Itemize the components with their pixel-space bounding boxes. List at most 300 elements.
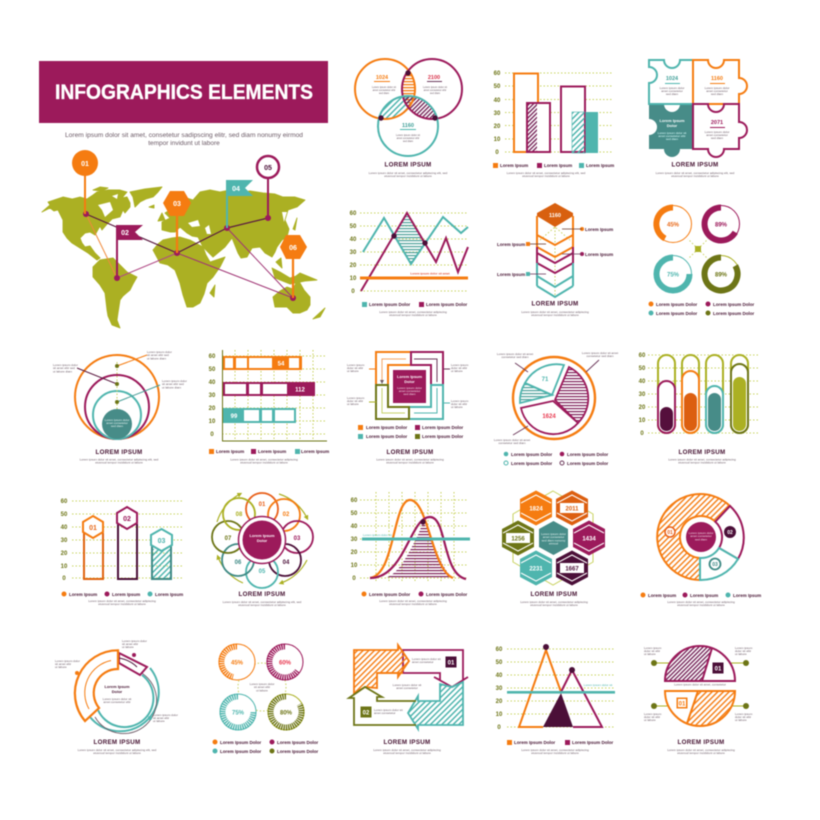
panel: nested square arrows: [347, 352, 469, 465]
panel: chevron tower: [497, 203, 613, 317]
puzzle piece purple: amet consetetur: [706, 133, 728, 137]
flower numbers: 05: [259, 569, 266, 575]
half pies caption: eiusmod tempor incididunt ut labore: [677, 751, 725, 755]
hbar labels: [209, 354, 216, 438]
panel: world map: [42, 150, 325, 328]
pin 04 flag: 04: [232, 186, 240, 193]
puzzle piece teal: amet consetetur: [661, 89, 683, 93]
venn intersection dots: [378, 70, 438, 121]
tower teal chevrons: [537, 263, 573, 297]
hbar labels: 0: [210, 432, 214, 438]
pin 05 ring: [257, 156, 279, 218]
triangle axis labels: 20: [496, 699, 503, 705]
pie leaders: [513, 360, 599, 435]
puzzle piece purple: 2071: [711, 120, 723, 126]
arrows caption: Lorem ipsum dolor sit amet, consectetur adipiscing: [373, 748, 441, 752]
flower caption: eiusmod tempor incididunt ut labore: [238, 603, 286, 607]
purple line: [361, 213, 468, 291]
arrow lower note: amet consetetur: [374, 711, 396, 715]
hexbar axis labels: 10: [61, 564, 68, 570]
triangle caption: Lorem ipsum dolor sit amet, consectetur adipiscing: [521, 748, 589, 752]
pill axis labels: 20: [639, 405, 646, 411]
flower numbers: 03: [294, 536, 301, 542]
triangle apex dots: [543, 644, 575, 673]
pin 03 hexagon: 03: [173, 201, 181, 208]
dark overlap triangle: [543, 693, 573, 727]
honeycomb caption: eiusmod tempor incididunt ut labore: [530, 603, 578, 607]
flower center: Dolor: [257, 538, 268, 543]
line legend: [362, 302, 468, 307]
pie note top right: consetetur sed diam: [586, 354, 614, 358]
bar axis labels: [494, 71, 501, 156]
filled core circle: amet consetetur: [106, 421, 128, 425]
filled core circle: Lorem ipsum dolor: [105, 418, 129, 422]
square note left bottom: dolor sit elitr: [347, 399, 363, 403]
donut 89 purple: 89%: [715, 222, 728, 228]
spiral center text: Dolor: [112, 689, 123, 694]
pie legend: Lorem Ipsum Dolor: [511, 461, 553, 466]
pill heading: LOREM IPSUM: [679, 449, 725, 456]
venn values: 1160: [402, 123, 414, 129]
honeycomb background hexagon: [513, 491, 593, 585]
arrows caption: eiusmod tempor incididunt ut labore: [383, 751, 431, 755]
hexbar caption: eiusmod tempor incididunt ut labore: [98, 602, 146, 606]
square legend: [358, 425, 464, 439]
half note top right: dolor sit elitr: [735, 649, 751, 653]
arrow notes: amet consetetur: [412, 660, 434, 664]
bell caption: Lorem ipsum dolor sit amet, consectetur adipiscing: [379, 599, 447, 603]
panel: triangle chart: [496, 644, 615, 755]
center disc: amet consetetur: [690, 534, 712, 538]
panel: venn diagram: [355, 59, 462, 178]
hbar caption: eiusmod tempor incididunt ut labore: [240, 461, 288, 465]
purple hbar: 112: [295, 388, 305, 394]
orange triangle: [519, 650, 561, 727]
panel: spiral ring: [55, 639, 178, 755]
pill axis labels: 0: [640, 431, 644, 437]
square note left bottom: ut labore: [347, 402, 359, 406]
square note right top: [443, 363, 469, 373]
venn small text 3: sed diam: [403, 140, 413, 143]
teal line: [363, 217, 468, 264]
hex center: eirmod: [549, 542, 558, 546]
hexbar legend: Lorem Ipsum: [69, 592, 97, 597]
honeycomb caption: Lorem ipsum dolor sit amet, consectetur adipiscing: [520, 600, 588, 604]
spiral note right: ut labore: [153, 719, 165, 723]
hexbar legend: Lorem Ipsum: [112, 592, 140, 597]
pill axis labels: 50: [639, 366, 646, 372]
chart axes: [222, 350, 327, 441]
leaders and dots: [77, 355, 160, 404]
ring note top: ut labore diam: [147, 356, 167, 360]
tower label right lower: Lorem Ipsum: [585, 252, 613, 257]
flower numbers: [225, 502, 301, 575]
pin 06 hexagon: [280, 235, 307, 298]
rings heading: LOREM IPSUM: [96, 449, 142, 456]
donut 89 olive: 89%: [715, 272, 728, 278]
badge 03: 03: [712, 562, 718, 568]
gauge legend: Lorem Ipsum Dolor: [277, 749, 319, 754]
top half pie: 01: [715, 666, 722, 672]
ring note right: sit amet elitr sed: [162, 382, 184, 386]
purple arrow: [403, 650, 468, 687]
puzzle piece orange: sed diam: [711, 92, 724, 96]
bell threshold line: Lorem ipsum dolor sit: [363, 533, 392, 537]
spiral center text: [103, 684, 132, 704]
bar axis labels: 0: [495, 150, 499, 156]
panel: donut charts: [648, 206, 755, 316]
puzzle piece orange: amet consetetur: [706, 89, 728, 93]
panel: horizontal bar chart: [209, 350, 329, 465]
half pies heading: LOREM IPSUM: [678, 739, 724, 746]
flower numbers: 06: [235, 560, 242, 566]
puzzle piece dark teal: [649, 104, 693, 157]
hexbar axis labels: 0: [62, 576, 66, 582]
pin 03 hexagon: [163, 191, 191, 253]
panel: hexagon bars: [61, 499, 183, 606]
hex 2011: 2011: [565, 506, 579, 512]
pie white purple slice: 1624: [542, 414, 556, 420]
donut legend: Lorem Ipsum Dolor: [656, 302, 698, 307]
triangle axis labels: [496, 647, 503, 731]
bar axis labels: 10: [494, 137, 501, 143]
hexbar axis labels: 30: [61, 538, 68, 544]
puzzle heading: LOREM IPSUM: [672, 162, 718, 168]
center disc: sed diam: [695, 537, 708, 541]
arrow lower note: Lorem ipsum dolor sit: [374, 708, 403, 712]
nested rings: [75, 355, 159, 439]
puzzle piece orange: Lorem ipsum dolor: [705, 86, 729, 90]
gauge note: ut labore: [256, 688, 268, 692]
half note bottom right: ut labore: [735, 718, 747, 722]
puzzle piece purple: Lorem ipsum dolor: [705, 130, 729, 134]
pill axis labels: 30: [639, 392, 646, 398]
purple arrow block: [119, 653, 147, 675]
panel: honeycomb: [502, 490, 605, 607]
bell axis labels: 20: [351, 550, 358, 556]
triangle axis labels: 60: [496, 647, 503, 653]
center disc: Lorem ipsum dolor: [689, 531, 713, 535]
line caption: eiusmod tempor incididunt ut labore: [389, 313, 437, 317]
tower heading: LOREM IPSUM: [532, 300, 578, 308]
hbar legend: Lorem Ipsum: [216, 449, 244, 454]
square legend: Lorem Ipsum Dolor: [422, 434, 464, 439]
ring caption: Lorem ipsum dolor sit amet, consectetur adipiscing: [667, 600, 735, 604]
pie note top right: Lorem ipsum dolor sit amet: [582, 351, 618, 355]
spiral center text: Lorem ipsum dolor sit: [103, 697, 132, 701]
puzzle piece dark teal: Lorem Ipsum: [659, 118, 685, 123]
orange curve: [370, 500, 453, 578]
flower numbers: 07: [225, 536, 232, 542]
bell legend: Lorem Ipsum Dolor: [426, 592, 468, 597]
panel: flower diagram: [212, 493, 313, 607]
triangle caption: eiusmod tempor incididunt ut labore: [531, 751, 579, 755]
bell hatched area: [385, 522, 453, 578]
square note right bottom: dolor sit elitr: [451, 402, 467, 406]
white center connector: [377, 672, 403, 674]
gauge 60: 60%: [279, 660, 292, 666]
pie hatched teal slice: [520, 383, 552, 403]
line axis labels: 10: [350, 276, 357, 282]
ring note top: sit amet elitr sed: [147, 353, 169, 357]
square quadrants: [376, 352, 443, 419]
puzzle piece dark teal: amet consetetur elitr: [658, 134, 686, 138]
bar legend: [493, 163, 614, 168]
tower label right upper: Lorem Ipsum: [585, 227, 613, 232]
hex 2231: 2231: [529, 566, 543, 572]
panel: bell curves: [351, 492, 470, 606]
triangle axis labels: 40: [496, 673, 503, 679]
arrows heading: LOREM IPSUM: [384, 739, 430, 746]
bell axis labels: [351, 498, 358, 582]
bell axis labels: 60: [351, 498, 358, 504]
pie note top left: consetetur sed diam: [501, 355, 529, 359]
line legend: Lorem Ipsum Dolor: [426, 302, 468, 307]
spiral caption: eiusmod tempor incididunt ut labore: [93, 751, 141, 755]
half note top left: Lorem ipsum: [644, 646, 662, 650]
puzzle piece teal: [649, 60, 693, 104]
pin 01: 01: [81, 161, 89, 168]
triangle legend: Lorem Ipsum Dolor: [572, 740, 614, 745]
half note top right: ut labore: [735, 652, 747, 656]
line axis labels: 60: [350, 211, 357, 217]
ring legend: [640, 592, 761, 598]
puzzle piece purple: sed diam: [711, 136, 724, 140]
spiral note left: ut labore: [55, 665, 67, 669]
spiral note left: Lorem ipsum dolor: [55, 659, 80, 663]
panel: ring segments: [640, 494, 761, 607]
spiral note top: Lorem ipsum dolor: [122, 639, 147, 643]
venn circles: [355, 59, 462, 156]
bottom half pie: 01: [679, 702, 686, 708]
hbar caption: Lorem ipsum dolor sit amet, consectetur adipiscing: [230, 458, 298, 462]
tower label left lower: Lorem Ipsum: [497, 272, 525, 277]
puzzle caption: Lorem ipsum dolor sit amet, consectetur adipiscing elit, sed: [656, 171, 735, 175]
spiral dots: [75, 653, 152, 720]
crossing dots: [391, 233, 428, 246]
hexbar axis labels: 50: [61, 512, 68, 518]
donut legend: Lorem Ipsum Dolor: [713, 311, 755, 316]
spiral center text: amet consetetur elitr: [103, 700, 131, 704]
half pie dots: [651, 660, 749, 709]
tower caption: Lorem ipsum dolor sit amet, consectetur adipiscing: [521, 310, 589, 314]
center square: [695, 246, 701, 252]
venn heading: LOREM IPSUM: [385, 162, 431, 168]
orange hatched arrow: [354, 645, 409, 693]
pie note bottom: consetetur sed diam: [498, 441, 526, 445]
half pie middle text: Lorem ipsum dolor sit amet, consetetur: [674, 682, 726, 686]
donut legend: [648, 302, 755, 316]
pin 06 hexagon: 06: [289, 245, 297, 252]
hbar legend: [209, 449, 329, 454]
central square text: Lorem ipsum dolor: [397, 386, 422, 390]
honeycomb heading: LOREM IPSUM: [531, 591, 577, 598]
donut legend: Lorem Ipsum Dolor: [713, 302, 755, 307]
orange bar: [514, 74, 538, 152]
hbar labels: 10: [209, 419, 216, 425]
square note left bottom: [347, 396, 376, 406]
square note right bottom: ut labore: [451, 405, 463, 409]
bar legend: Lorem Ipsum: [586, 163, 614, 168]
gauge 75: 75%: [232, 710, 245, 716]
half note top left: dolor sit elitr: [644, 649, 660, 653]
donut legend: Lorem Ipsum Dolor: [656, 311, 698, 316]
venn overlap hatching: [382, 74, 436, 119]
bar axis labels: 40: [494, 98, 501, 104]
hex 1256: 1256: [511, 536, 525, 542]
square note left top: [347, 363, 376, 373]
tower orange chevrons: [537, 216, 573, 257]
badge 01: 01: [667, 530, 673, 536]
subtitle text: tempor invidunt ut labore: [148, 140, 220, 147]
pie note top left: Lorem ipsum dolor sit amet: [497, 352, 533, 356]
hbar labels: 40: [209, 380, 216, 386]
hex center: sed diam nonumy: [542, 538, 566, 542]
venn small text: Lorem ipsum dolor sit: [372, 86, 396, 89]
bar caption: eiusmod tempor incididunt ut labore: [522, 174, 570, 178]
puzzle piece orange: 1160: [711, 76, 723, 82]
spiral note left: sit amet elitr: [55, 662, 71, 666]
olive arrow: [349, 687, 416, 725]
bell axis labels: 30: [351, 537, 358, 543]
half note bottom left: Lorem ipsum: [644, 712, 662, 716]
purple hatched bar: [527, 103, 550, 152]
ring note right: ut labore diam: [162, 385, 182, 389]
square note right bottom: [443, 399, 469, 409]
venn small text: amet consetetur elitr: [373, 89, 395, 92]
venn caption: Lorem ipsum dolor sit amet, consectetur adipiscing elit, sed: [369, 171, 448, 175]
pin 04 flag: [226, 180, 253, 228]
bell axis labels: 50: [351, 511, 358, 517]
spiral heading: LOREM IPSUM: [94, 739, 140, 746]
ring note left: Lorem ipsum dolor: [53, 363, 78, 367]
pie legend: [504, 452, 609, 466]
donut 45: 45%: [667, 222, 680, 228]
spiral note right: sit amet elitr: [153, 716, 169, 720]
pill 1: [658, 355, 675, 433]
venn small text 3: Lorem ipsum dolor sit: [396, 134, 420, 137]
gauge 80: 80%: [280, 710, 293, 716]
arrow notes: Lorem ipsum dolor sit: [412, 657, 441, 661]
teal arcs: [90, 668, 159, 734]
spiral note top: ut labore: [122, 645, 134, 649]
bell legend: [362, 592, 468, 597]
center disc: [686, 522, 716, 552]
gauge legend: Lorem Ipsum Dolor: [220, 749, 262, 754]
orange hbar: 54: [278, 362, 285, 368]
half pie connectors: [654, 663, 746, 706]
pill 3: [706, 355, 723, 433]
square legend: Lorem Ipsum Dolor: [366, 425, 408, 430]
spiral caption: Lorem ipsum dolor sit amet, consectetur adipiscing elit, sed: [78, 748, 157, 752]
hex bar 01: 01: [89, 525, 97, 532]
square note left top: ut labore: [347, 369, 359, 373]
teal hatched arrow: [408, 682, 463, 729]
orange arrow block: [75, 650, 118, 721]
teal sector: [700, 548, 738, 580]
pill axis labels: [639, 353, 646, 437]
central square text: sed diam: [403, 392, 416, 396]
hatched overlap: [394, 213, 425, 264]
spiral center text: Lorem Ipsum: [104, 684, 130, 689]
bell legend: Lorem Ipsum Dolor: [369, 592, 411, 597]
square caption: eiusmod tempor incididunt ut labore: [386, 461, 434, 465]
puzzle piece purple: [693, 104, 747, 157]
pill 4: [731, 355, 748, 433]
square heading: LOREM IPSUM: [387, 449, 433, 456]
panel: pill chart: [639, 353, 758, 465]
puzzle caption: eiusmod tempor incididunt ut labore: [671, 174, 719, 178]
central square text: [393, 370, 426, 403]
line caption: Lorem ipsum dolor sit amet, consectetur adipiscing: [379, 310, 447, 314]
venn values: 1024: [376, 75, 389, 81]
central square text: Dolor: [404, 379, 415, 384]
half pies caption: Lorem ipsum dolor sit amet, consectetur adipiscing: [667, 748, 735, 752]
bar axis labels: 20: [494, 124, 501, 130]
line axis labels: 0: [351, 289, 355, 295]
panel: vertical bar chart: [493, 71, 614, 178]
panel: line chart: [350, 211, 468, 317]
hbar labels: 60: [209, 354, 216, 360]
filled core circle: sed diam: [111, 424, 124, 428]
bell axis labels: 10: [351, 563, 358, 569]
central square text: amet consetetur: [399, 389, 420, 393]
panel: puzzle: [649, 60, 747, 178]
venn small text 3: amet consetetur elitr: [397, 137, 419, 140]
bell axis labels: 40: [351, 524, 358, 530]
line axis labels: 40: [350, 237, 357, 243]
bell crossing dot: [420, 519, 426, 525]
triangle legend: [507, 740, 614, 745]
triangle axis labels: 0: [497, 725, 501, 731]
purple tall bar: [561, 86, 585, 152]
pie legend: Lorem Ipsum Dolor: [511, 452, 553, 457]
rings caption: eiusmod tempor incididunt ut labore: [95, 461, 143, 465]
hbar legend: Lorem Ipsum: [258, 449, 286, 454]
half note bottom left: ut labore: [644, 718, 656, 722]
panel: half pies: [644, 646, 753, 755]
panel: tick gauges: [212, 644, 319, 754]
flower petals: [212, 493, 313, 588]
square caption: Lorem ipsum dolor sit amet, consectetur adipiscing: [376, 458, 444, 462]
donut 75: 75%: [667, 272, 680, 278]
ring note top: Lorem ipsum dolor: [147, 350, 172, 354]
hex 1824: 1824: [529, 506, 543, 512]
ring legend: Lorem Ipsum: [733, 593, 761, 598]
triangle legend: Lorem Ipsum Dolor: [514, 740, 556, 745]
half note bottom right: dolor sit elitr: [735, 715, 751, 719]
tower top hexagon: 1160: [549, 213, 561, 219]
pill caption: eiusmod tempor incididunt ut labore: [678, 461, 726, 465]
purple sector: [715, 506, 744, 559]
pie teal slice: 71: [542, 377, 549, 383]
flower heading: LOREM IPSUM: [239, 591, 285, 598]
pie legend: Lorem Ipsum Dolor: [567, 461, 609, 466]
hexbar axis labels: 40: [61, 525, 68, 531]
ring note left: sit amet elitr sed: [53, 366, 75, 370]
square note right top: Lorem ipsum: [451, 363, 469, 367]
venn small text: sed diam: [379, 92, 389, 95]
line legend: Lorem Ipsum Dolor: [369, 302, 411, 307]
square legend: Lorem Ipsum Dolor: [366, 434, 408, 439]
bar legend: Lorem Ipsum: [500, 163, 528, 168]
flower caption: Lorem ipsum dolor sit amet, consectetur adipiscing elit, sed: [223, 600, 302, 604]
teal bar: [572, 112, 598, 153]
hexbar legend: Lorem Ipsum: [155, 592, 183, 597]
tower caption: eiusmod tempor incididunt ut labore: [531, 313, 579, 317]
bar axis labels: 50: [494, 84, 501, 90]
arrow center note: Lorem ipsum dolor sit: [393, 683, 422, 687]
